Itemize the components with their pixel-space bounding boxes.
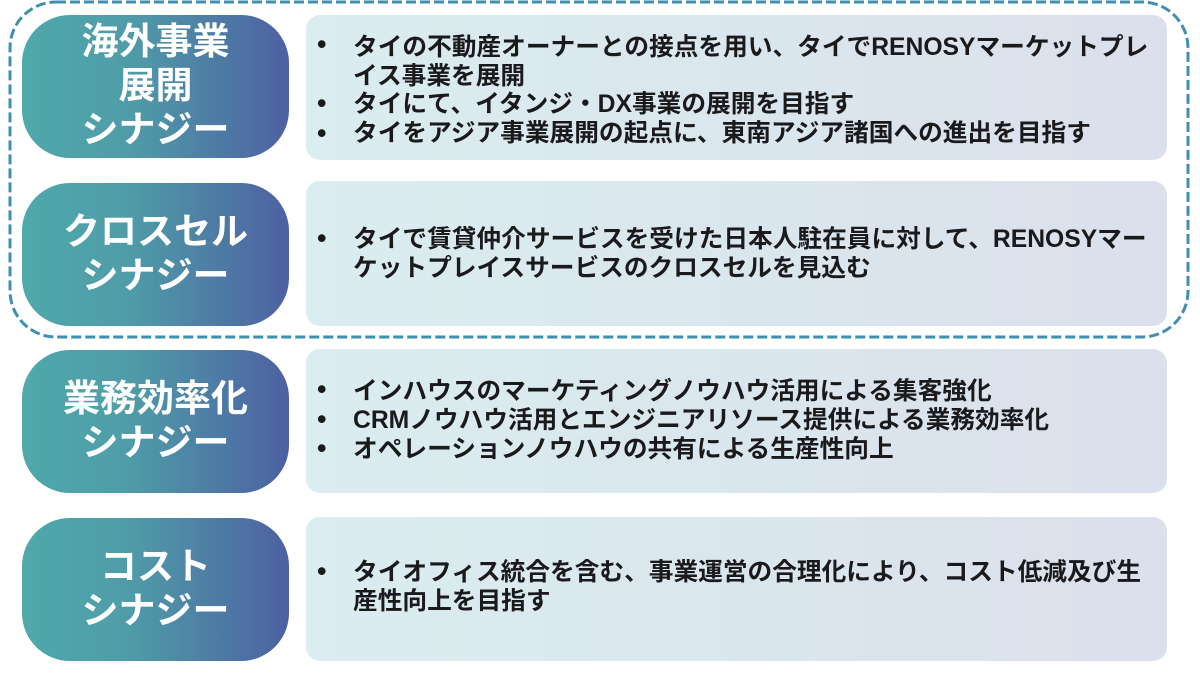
- pill: overseas synergy: 展開: [118, 65, 192, 106]
- pill: cost synergy: コスト: [100, 546, 211, 587]
- pill: cross-sell synergy: シナジー: [82, 255, 230, 296]
- text: overseas synergy bullets: [317, 29, 1148, 148]
- panel: cross-sell synergy: [306, 181, 1167, 326]
- pill: cost synergy: [22, 518, 289, 661]
- text: cross-sell bullets: [317, 223, 1147, 282]
- text: cost bullets: 産性向上を目指す: [353, 588, 551, 615]
- text: overseas synergy bullets: タイにて、イタンジ・DX事業の展開を目指す: [353, 91, 854, 118]
- text: cross-sell bullets: タイで賃貸仲介サービスを受けた日本人駐在員に対して、RENOSYマー: [353, 226, 1147, 253]
- text: cost bullets: •: [317, 556, 326, 586]
- text: efficiency bullets: CRMノウハウ活用とエンジニアリソース提供による業務効率化: [353, 407, 1049, 434]
- pill: efficiency synergy: 業務効率化: [63, 378, 248, 419]
- pill: efficiency synergy: シナジー: [82, 422, 230, 463]
- text: cross-sell bullets: ケットプレイスサービスのクロスセルを見込む: [353, 255, 871, 282]
- text: overseas synergy bullets: •: [317, 88, 326, 118]
- pill: overseas synergy: [22, 15, 289, 158]
- text: efficiency bullets: •: [317, 374, 326, 404]
- text: efficiency bullets: [317, 374, 1049, 463]
- pill: efficiency synergy: [22, 350, 289, 493]
- pill: cross-sell synergy: クロスセル: [63, 211, 248, 252]
- panel: efficiency synergy: [306, 349, 1167, 493]
- text: cost bullets: [317, 556, 1141, 615]
- text: overseas synergy bullets: イス事業を展開: [353, 63, 525, 90]
- text: overseas synergy bullets: •: [317, 118, 326, 148]
- text: overseas synergy bullets: •: [317, 29, 326, 59]
- text: overseas synergy bullets: タイをアジア事業展開の起点に、東南アジア諸国への進出を目指す: [353, 120, 1091, 147]
- panel: cost synergy: [306, 517, 1167, 661]
- text: efficiency bullets: •: [317, 433, 326, 463]
- text: cross-sell bullets: •: [317, 223, 326, 253]
- pill: overseas synergy: 海外事業: [82, 21, 230, 62]
- panel: overseas synergy: [306, 15, 1167, 160]
- text: efficiency bullets: オペレーションノウハウの共有による生産性向上: [353, 436, 894, 463]
- text: cost bullets: タイオフィス統合を含む、事業運営の合理化により、コスト低減及び生: [353, 559, 1141, 586]
- pill: overseas synergy: シナジー: [82, 109, 230, 150]
- pill: cross-sell synergy: [22, 183, 289, 326]
- text: efficiency bullets: •: [317, 404, 326, 434]
- pill: cost synergy: シナジー: [82, 590, 230, 631]
- text: overseas synergy bullets: タイの不動産オーナーとの接点を用い、タイでRENOSYマーケットプレ: [353, 34, 1148, 61]
- text: efficiency bullets: インハウスのマーケティングノウハウ活用による集客強化: [353, 378, 992, 405]
- dashed highlight frame: [8, 0, 1190, 338]
